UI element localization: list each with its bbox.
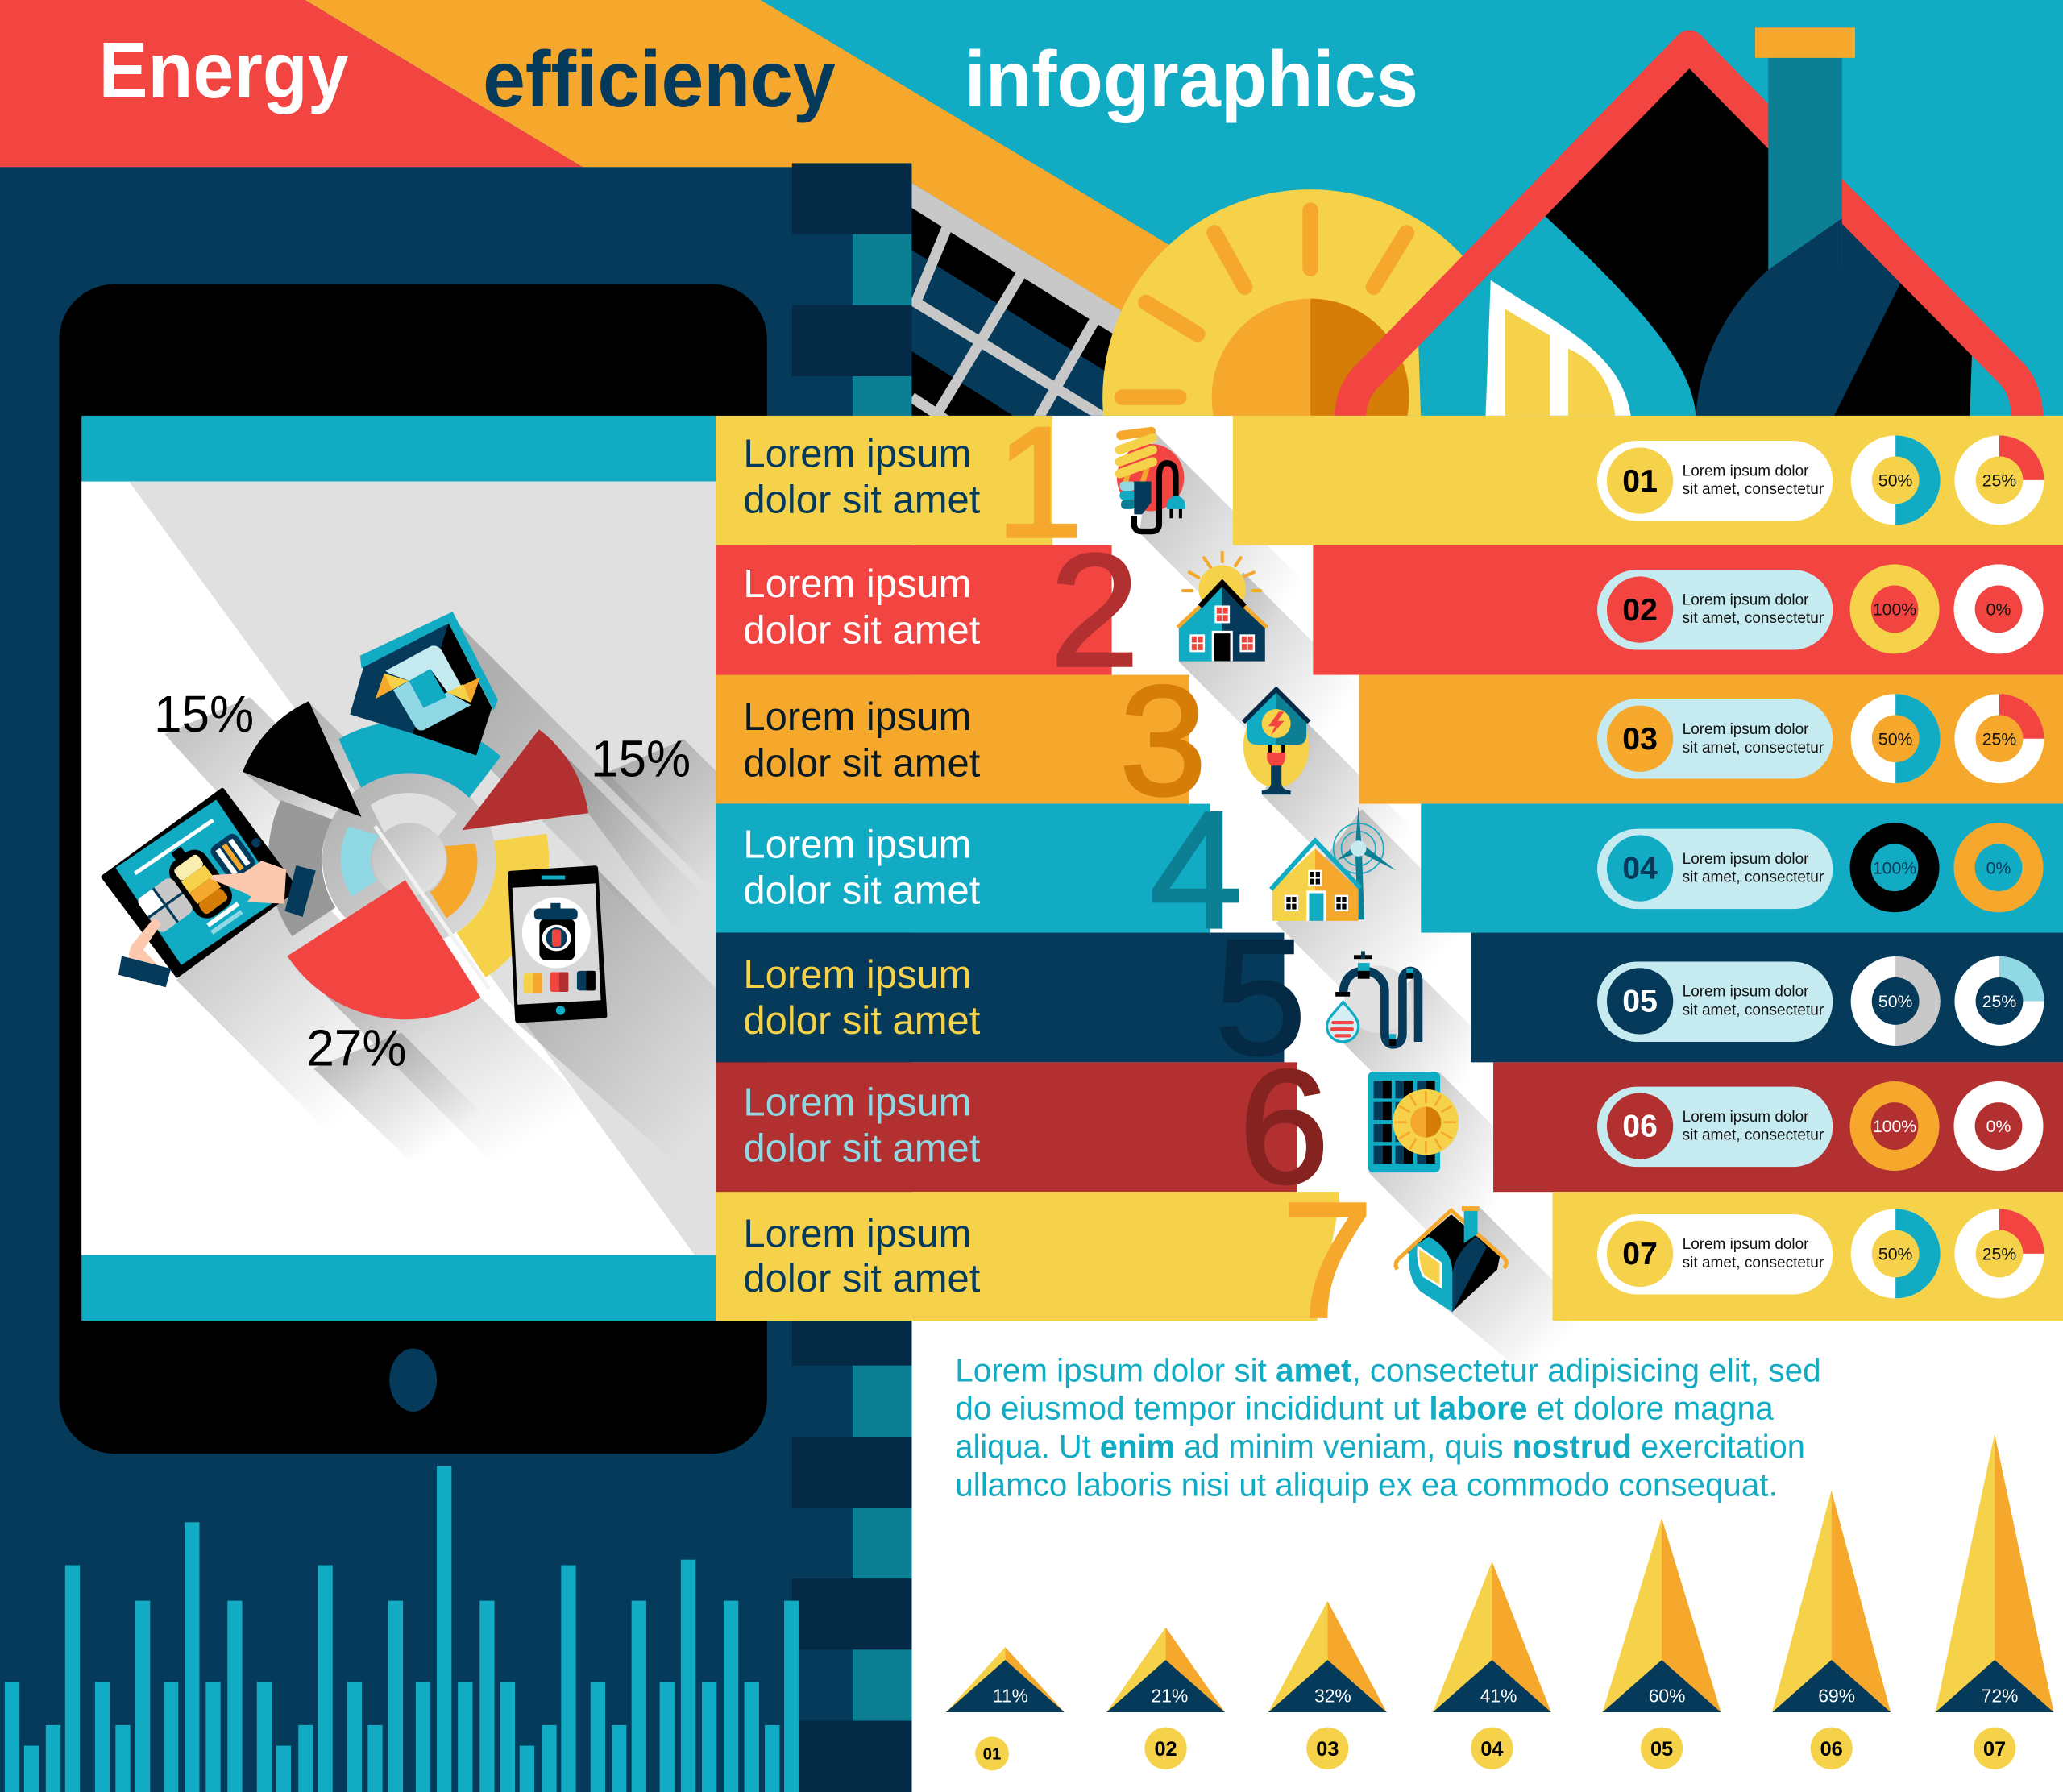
segment: red wedge bbox=[288, 880, 480, 1019]
icon 1: bulb and plug bbox=[1117, 432, 1185, 532]
row labels: dolor sit amet bbox=[743, 999, 981, 1043]
pyramid 04 bbox=[1433, 1562, 1551, 1769]
pill 02: 02 bbox=[1622, 593, 1658, 628]
icon 5: water tap and pipe bbox=[1327, 951, 1418, 1046]
row 4 bars bbox=[716, 804, 2063, 933]
pill 05: sit amet, consectetur bbox=[1683, 1002, 1824, 1019]
icon 4: wind turbine house bbox=[1271, 806, 1396, 921]
title bbox=[98, 26, 1418, 123]
icon: battery on tablet bbox=[159, 838, 238, 924]
icon: smartphone bbox=[510, 869, 604, 1020]
donut 0%: 0% bbox=[1986, 1118, 2011, 1136]
pill 07: sit amet, consectetur bbox=[1683, 1254, 1824, 1271]
pyramid 05 bbox=[1603, 1518, 1721, 1769]
pill 01: 01 bbox=[1622, 464, 1658, 499]
donut 100%: 100% bbox=[1873, 859, 1916, 877]
navy left panel bbox=[0, 167, 911, 1792]
pyramid 06 bbox=[1772, 1491, 1891, 1769]
pill 06: sit amet, consectetur bbox=[1683, 1126, 1824, 1144]
pill 03 bbox=[1597, 699, 1833, 779]
segment: light gray ring bbox=[371, 793, 457, 836]
pyramid 02 bbox=[1106, 1628, 1225, 1769]
donut 50% bbox=[1851, 1209, 1941, 1298]
pill 02: Lorem ipsum dolor bbox=[1683, 591, 1809, 609]
donut 25% bbox=[1954, 1209, 2044, 1298]
body paragraph: do eiusmod tempor incididunt ut labore et dolore magna bbox=[955, 1390, 1774, 1427]
stat row 2 bbox=[1597, 564, 2044, 653]
pyramid 07: 72% bbox=[1982, 1686, 2018, 1707]
donut 50% bbox=[1851, 694, 1941, 783]
big numerals: 6 bbox=[1239, 1036, 1329, 1217]
pill 06 bbox=[1597, 1087, 1833, 1167]
pill 05: 05 bbox=[1622, 985, 1658, 1019]
pyramid 03: 32% bbox=[1314, 1686, 1351, 1707]
pyramid 05: 60% bbox=[1649, 1686, 1685, 1707]
donut 100% bbox=[1850, 1081, 1940, 1171]
pyramid 02: 02 bbox=[1154, 1738, 1177, 1761]
row labels: Lorem ipsum bbox=[743, 1081, 971, 1124]
donut 100%: 100% bbox=[1873, 1118, 1916, 1136]
stat row 6 bbox=[1597, 1081, 2044, 1171]
donut 25% bbox=[1954, 956, 2044, 1046]
segment: orange ring bbox=[430, 844, 477, 919]
row 1 bars bbox=[716, 416, 2063, 545]
row labels: Lorem ipsum bbox=[743, 695, 971, 739]
big numerals: 4 bbox=[1149, 776, 1243, 963]
pill 03: Lorem ipsum dolor bbox=[1683, 720, 1809, 738]
pill 04 bbox=[1597, 829, 1833, 909]
donut 25%: 25% bbox=[1982, 993, 2016, 1011]
pyramid 01: 11% bbox=[993, 1686, 1028, 1707]
donut 50%: 50% bbox=[1878, 472, 1913, 491]
stat row 3 bbox=[1597, 694, 2044, 783]
brick column bbox=[792, 163, 911, 1792]
donut 100% bbox=[1850, 564, 1940, 653]
row labels: Lorem ipsum bbox=[743, 823, 971, 866]
donut 100% bbox=[1850, 823, 1940, 912]
row 6 bars bbox=[716, 1062, 2063, 1192]
pyramid 04: 41% bbox=[1480, 1686, 1517, 1707]
pill 02: sit amet, consectetur bbox=[1683, 609, 1824, 627]
stat row 5 bbox=[1597, 956, 2044, 1046]
icon 2: solar house bbox=[1177, 553, 1267, 662]
icon: small chart card bbox=[208, 832, 258, 883]
donut 0% bbox=[1953, 564, 2044, 653]
pill 05 bbox=[1597, 961, 1833, 1042]
pyramid chart bbox=[946, 1434, 2054, 1770]
pie chart bbox=[243, 701, 588, 1019]
donut 25%: 25% bbox=[1982, 730, 2016, 749]
pyramid 06: 69% bbox=[1818, 1686, 1855, 1707]
header background bbox=[0, 0, 2063, 416]
pill 01 bbox=[1597, 441, 1833, 521]
icon long shadows bbox=[1139, 432, 1618, 1397]
body paragraph: Lorem ipsum dolor sit amet, consectetur adipisicing elit, sed bbox=[955, 1351, 1821, 1388]
donut 100%: 100% bbox=[1873, 601, 1916, 620]
row 2 bars bbox=[716, 545, 2063, 675]
row labels bbox=[743, 433, 981, 1300]
pill 01: sit amet, consectetur bbox=[1683, 480, 1824, 498]
pill 07: Lorem ipsum dolor bbox=[1683, 1235, 1809, 1253]
row labels: dolor sit amet bbox=[743, 608, 981, 652]
pie labels: 27% bbox=[306, 1019, 406, 1076]
row 3 bars bbox=[716, 675, 2063, 804]
body paragraph bbox=[955, 1351, 1821, 1503]
pill 06: Lorem ipsum dolor bbox=[1683, 1108, 1809, 1126]
row 5 bars bbox=[716, 933, 2063, 1062]
donut 50%: 50% bbox=[1878, 1246, 1913, 1264]
stat row 7 bbox=[1597, 1209, 2044, 1298]
body paragraph: aliqua. Ut enim ad minim veniam, quis nostrud exercitation bbox=[955, 1428, 1805, 1465]
pill 07 bbox=[1597, 1214, 1833, 1295]
donut 50%: 50% bbox=[1878, 730, 1913, 749]
pyramid 05: 05 bbox=[1650, 1738, 1673, 1761]
pill 06: 06 bbox=[1622, 1110, 1658, 1144]
pyramid 01 bbox=[946, 1647, 1065, 1770]
title: Energy bbox=[98, 26, 349, 114]
donut 25% bbox=[1954, 435, 2044, 525]
icon: house with envelope bbox=[350, 612, 498, 755]
segment: black wedge bbox=[243, 701, 361, 817]
big numerals: 3 bbox=[1119, 653, 1206, 828]
row labels: dolor sit amet bbox=[743, 1127, 981, 1171]
row 7 bars bbox=[716, 1192, 2063, 1321]
pill 04: 04 bbox=[1622, 852, 1658, 886]
pill 02 bbox=[1597, 570, 1833, 650]
pyramid 03 bbox=[1268, 1601, 1387, 1769]
title: efficiency bbox=[483, 35, 836, 123]
row labels: Lorem ipsum bbox=[743, 953, 971, 997]
donut 25% bbox=[1954, 694, 2044, 783]
donut 0% bbox=[1953, 1081, 2044, 1171]
big numerals bbox=[995, 394, 1373, 1352]
pill 07: 07 bbox=[1622, 1237, 1658, 1271]
sun bbox=[1102, 189, 1486, 416]
donut 0% bbox=[1953, 823, 2044, 912]
pill 05: Lorem ipsum dolor bbox=[1683, 983, 1809, 1001]
row labels: Lorem ipsum bbox=[743, 562, 971, 606]
segment: teal ring bbox=[338, 721, 500, 798]
icon 7: small house bbox=[1396, 1206, 1506, 1312]
icon 6: solar panel with sun bbox=[1368, 1072, 1459, 1172]
body paragraph: ullamco laboris nisi ut aliquip ex ea commodo consequat. bbox=[955, 1466, 1778, 1503]
pyramid 02: 21% bbox=[1152, 1686, 1188, 1707]
row labels: dolor sit amet bbox=[743, 869, 981, 913]
icon: window card bbox=[136, 876, 195, 935]
pie labels: 15% bbox=[591, 730, 691, 787]
pyramid 07 bbox=[1936, 1434, 2054, 1769]
icon 3: power house bbox=[1243, 690, 1309, 794]
pyramid 07: 07 bbox=[1983, 1738, 2006, 1761]
donut 0%: 0% bbox=[1986, 859, 2011, 877]
stat row 4 bbox=[1597, 823, 2044, 912]
long shadows on tablet screen bbox=[164, 625, 716, 1151]
tablet device bbox=[59, 284, 767, 1454]
pyramid 01: 01 bbox=[983, 1746, 1001, 1764]
pyramid 06: 06 bbox=[1820, 1738, 1843, 1761]
pill 04: sit amet, consectetur bbox=[1683, 869, 1824, 886]
segment: yellow ring bbox=[457, 834, 549, 977]
row labels: dolor sit amet bbox=[743, 479, 981, 522]
pie labels: 15% bbox=[154, 686, 254, 743]
donut 50%: 50% bbox=[1878, 993, 1913, 1011]
stat row 1 bbox=[1597, 435, 2044, 525]
bar chart bbox=[5, 1466, 799, 1792]
donut 0%: 0% bbox=[1986, 601, 2011, 620]
big numerals: 5 bbox=[1214, 906, 1306, 1089]
segment: light blue ring bbox=[341, 827, 380, 897]
segment: dark red wedge bbox=[462, 729, 588, 830]
big numerals: 2 bbox=[1050, 521, 1139, 700]
pie labels bbox=[154, 686, 691, 1076]
row labels: Lorem ipsum bbox=[743, 433, 971, 476]
icon: tablet with hands bbox=[103, 790, 316, 987]
pill 01: Lorem ipsum dolor bbox=[1683, 463, 1809, 480]
pyramid 04: 04 bbox=[1480, 1738, 1503, 1761]
row labels: dolor sit amet bbox=[743, 741, 981, 785]
donut 50% bbox=[1851, 435, 1941, 525]
pyramid 03: 03 bbox=[1316, 1738, 1339, 1761]
segment: gray ring bbox=[268, 800, 335, 936]
pill 03: sit amet, consectetur bbox=[1683, 739, 1824, 757]
house illustration bbox=[1350, 27, 2028, 421]
pill 04: Lorem ipsum dolor bbox=[1683, 850, 1809, 868]
donut 25%: 25% bbox=[1982, 472, 2016, 491]
row labels: dolor sit amet bbox=[743, 1257, 981, 1300]
pill 03: 03 bbox=[1622, 722, 1658, 757]
big numerals: 7 bbox=[1282, 1168, 1373, 1352]
title: infographics bbox=[965, 35, 1418, 123]
big numerals: 1 bbox=[995, 394, 1083, 570]
solar panel illustration bbox=[911, 183, 1121, 421]
donut 50% bbox=[1851, 956, 1941, 1046]
donut 25%: 25% bbox=[1982, 1246, 2016, 1264]
row labels: Lorem ipsum bbox=[743, 1213, 971, 1256]
